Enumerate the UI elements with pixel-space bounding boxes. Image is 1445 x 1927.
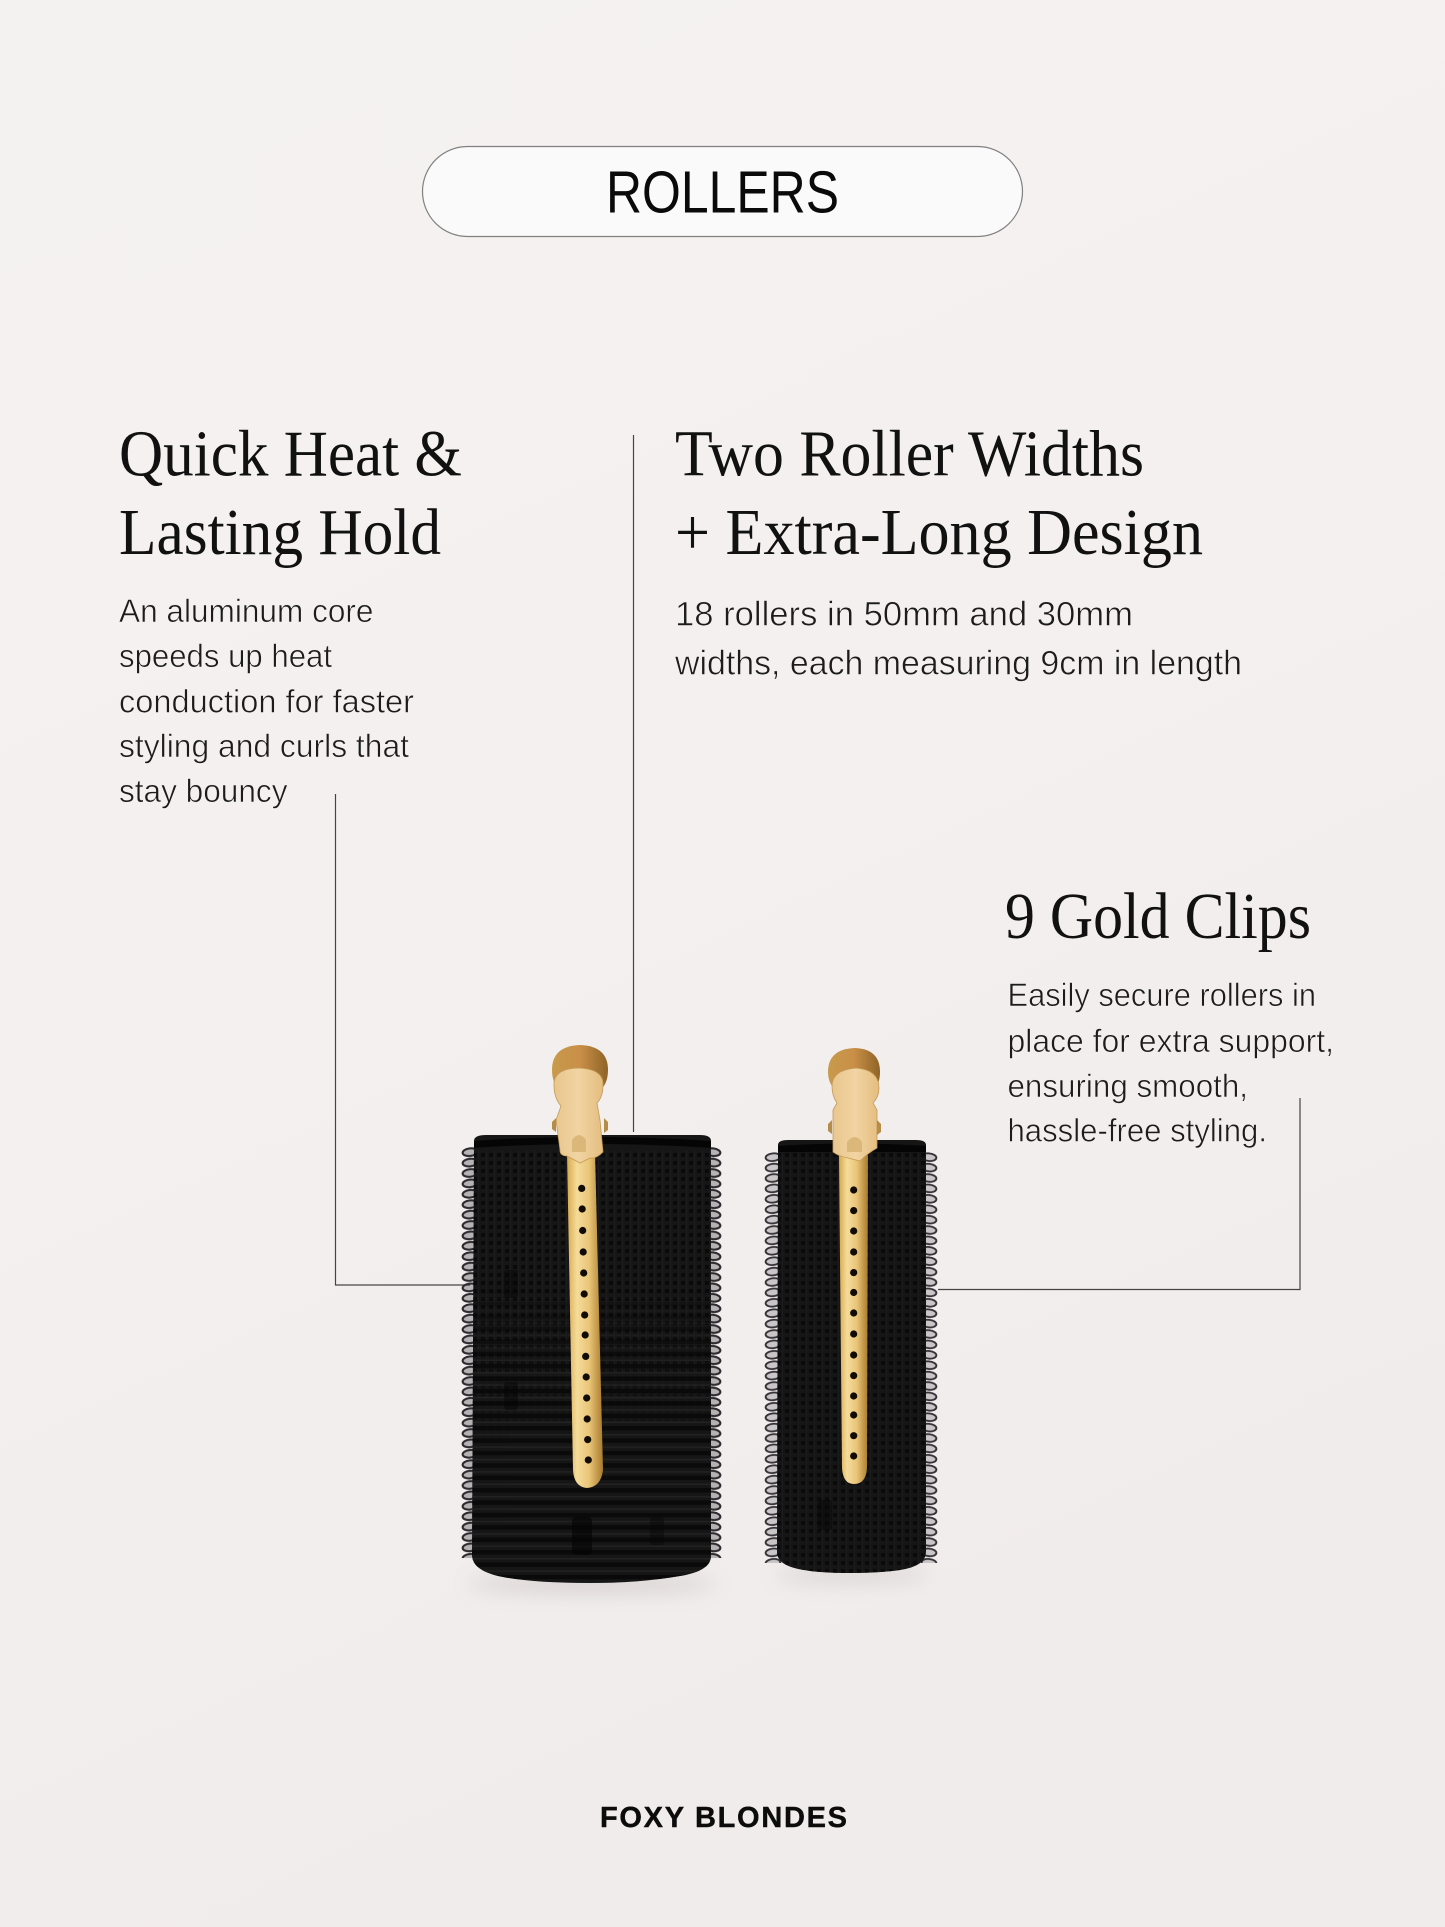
callout line: center widths (632, 435, 634, 1132)
text block: roller widths (674, 596, 1242, 682)
title pill: ROLLERS (606, 160, 839, 226)
product photo: two rollers with gold clips (461, 1045, 938, 1590)
text block: aluminum core: An aluminum core (119, 593, 374, 629)
gold clip: small (828, 1048, 881, 1484)
gold clip: large (552, 1045, 608, 1488)
text block: aluminum core: styling and curls that (119, 728, 409, 764)
heading: 9 Gold Clips: 9 Gold Clips (1005, 880, 1311, 953)
large roller (461, 1135, 722, 1590)
text block: gold clips: ensuring smooth, (1008, 1068, 1248, 1104)
heading: Two Roller Widths: Two Roller Widths (675, 418, 1144, 490)
brand wordmark: FOXY BLONDES (600, 1802, 847, 1834)
heading: Quick Heat and Lasting Hold (119, 418, 462, 569)
text block: gold clips (1008, 977, 1334, 1148)
text block: gold clips: Easily secure rollers in (1008, 977, 1316, 1013)
title pill (422, 146, 1022, 236)
small roller (764, 1140, 938, 1574)
text block: roller widths: widths, each measuring 9cm in length (674, 644, 1242, 682)
callout line: left heat (336, 794, 470, 1285)
heading: Quick Heat and Lasting Hold: Quick Heat & (119, 418, 462, 490)
text block: aluminum core: stay bouncy (119, 773, 288, 809)
heading: Two Roller Widths: + Extra-Long Design (675, 496, 1203, 569)
callout line: right clips (938, 1098, 1300, 1290)
text block: gold clips: place for extra support, (1008, 1023, 1334, 1059)
text block: gold clips: hassle-free styling. (1008, 1112, 1267, 1148)
text block: aluminum core (119, 593, 414, 809)
roller shadows (467, 1569, 930, 1592)
heading: Quick Heat and Lasting Hold: Lasting Hold (119, 496, 441, 569)
text block: aluminum core: speeds up heat (119, 638, 332, 674)
text block: roller widths: 18 rollers in 50mm and 30mm (675, 596, 1133, 634)
heading: Two Roller Widths (675, 418, 1203, 569)
text block: aluminum core: conduction for faster (119, 684, 414, 720)
